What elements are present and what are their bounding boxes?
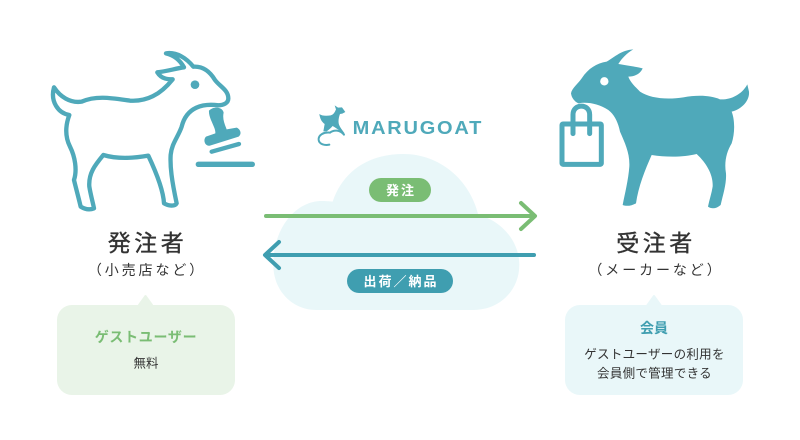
arrow: order, left to right — [266, 203, 535, 229]
pill: shipping / delivery: 出荷／納品 — [363, 274, 439, 289]
callout text: free: 無料 — [133, 356, 159, 370]
callout title: member: 会員 — [640, 320, 668, 336]
arrow: shipping, right to left — [265, 242, 534, 268]
callout text: member description: 会員側で管理できる — [597, 366, 712, 380]
logo wordmark: MARUGOAT — [353, 119, 482, 139]
pill: order: 発注 — [386, 183, 416, 198]
pill: shipping / delivery — [347, 269, 453, 293]
logo: MARUGOAT — [319, 105, 482, 145]
pill: order — [369, 178, 431, 202]
callout text: member description — [584, 348, 725, 380]
icon: solid goat holding a shopping bag — [562, 49, 749, 208]
panel: guest user callout — [57, 296, 235, 395]
callout title: guest user: ゲストユーザー — [95, 329, 197, 345]
callout text: member description: ゲストユーザーの利用を — [584, 348, 725, 362]
heading: supplier: 受注者 — [616, 230, 696, 256]
heading: orderer: 発注者 — [108, 230, 187, 256]
cloud background — [273, 154, 519, 310]
icon: logo goat on cloud arc — [319, 105, 345, 145]
panel: member callout — [565, 296, 743, 395]
icon: outlined goat holding a stamp — [53, 53, 252, 209]
subheading: retailers etc: （小売店など） — [88, 262, 206, 278]
subheading: manufacturers etc: （メーカーなど） — [588, 262, 724, 278]
